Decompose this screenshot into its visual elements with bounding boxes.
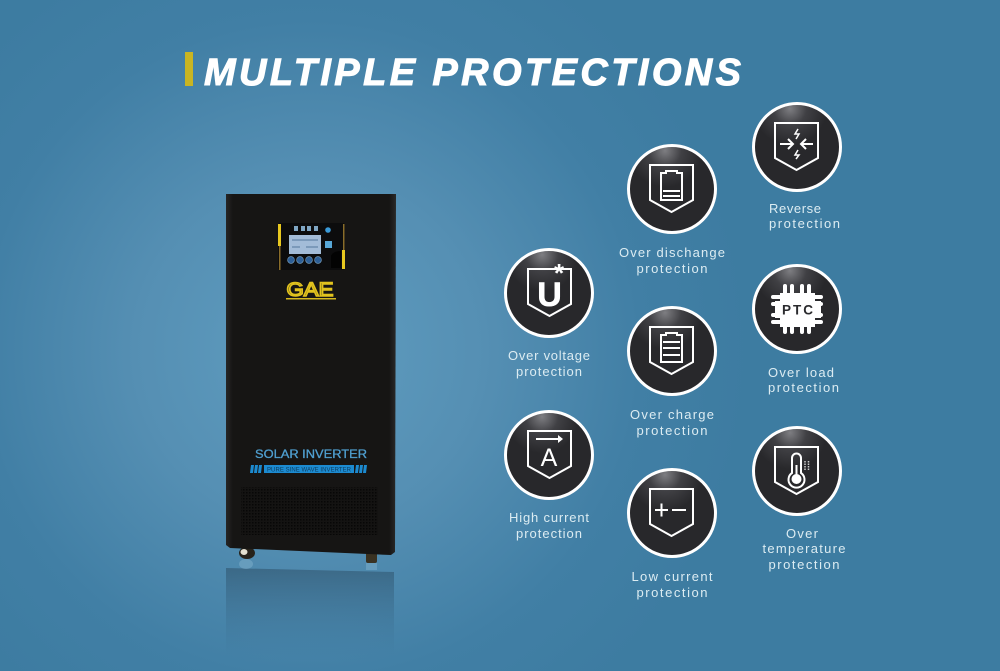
icon: shield with opposing arrows bbox=[754, 104, 840, 190]
item: over charge protection bbox=[628, 308, 716, 438]
icon: shield with A and arrow: A bbox=[541, 444, 558, 472]
product tagline stripe: PURE SINE WAVE INVERTER bbox=[267, 468, 352, 474]
title bbox=[185, 52, 741, 94]
label: Over charge bbox=[630, 407, 714, 422]
item: over temperature protection bbox=[754, 428, 846, 572]
icon: shield with thermometer bbox=[754, 428, 840, 514]
label: Reverse bbox=[769, 201, 821, 216]
label: protection bbox=[516, 364, 582, 379]
brand logo: GAE bbox=[286, 280, 334, 301]
label: protection bbox=[768, 380, 839, 395]
item: reverse protection bbox=[754, 104, 840, 231]
mode switch bbox=[325, 241, 332, 248]
label: protection bbox=[636, 585, 708, 600]
label: protection bbox=[768, 557, 840, 572]
icon: shield with plus and minus bbox=[628, 470, 716, 556]
label: protection bbox=[769, 216, 840, 231]
item: over load protection bbox=[754, 266, 840, 395]
cabinet reflection bbox=[226, 568, 394, 660]
label: Over voltage bbox=[508, 348, 590, 363]
label: protection bbox=[636, 261, 708, 276]
label: protection bbox=[516, 526, 582, 541]
item: low current protection bbox=[628, 470, 716, 600]
LCD screen bbox=[289, 235, 321, 254]
title text: MULTIPLE PROTECTIONS bbox=[204, 52, 741, 94]
cabinet body bbox=[226, 194, 396, 555]
icon: shield with U: U bbox=[537, 276, 562, 314]
caster wheels bbox=[239, 547, 377, 563]
wheel reflections bbox=[239, 559, 377, 570]
item: over voltage protection bbox=[506, 250, 592, 379]
label: protection bbox=[636, 423, 708, 438]
control panel bbox=[278, 223, 345, 270]
icon: shield with U bbox=[506, 250, 592, 336]
icon: PTC chip: PTC bbox=[782, 302, 813, 318]
label: Over bbox=[786, 526, 819, 541]
indicator lights bbox=[294, 226, 318, 231]
icon: shield with U: * bbox=[554, 258, 565, 288]
item: over dischange protection bbox=[619, 146, 725, 276]
item: high current protection bbox=[506, 412, 592, 541]
icon: shield with full battery bbox=[628, 308, 716, 394]
label: temperature bbox=[762, 541, 846, 556]
label: Over load bbox=[768, 365, 834, 380]
label: Over dischange bbox=[619, 245, 725, 260]
icon: shield with low battery bbox=[628, 146, 716, 232]
product tagline stripe bbox=[250, 465, 367, 474]
label: Low current bbox=[632, 569, 713, 584]
panel gold trim bbox=[278, 224, 281, 246]
panel buttons bbox=[288, 257, 321, 263]
product name: SOLAR INVERTER bbox=[255, 449, 367, 461]
power light bbox=[325, 227, 331, 233]
power socket bbox=[331, 251, 341, 268]
label: High current bbox=[509, 510, 589, 525]
product: solar inverter cabinet bbox=[226, 194, 396, 660]
title accent bar bbox=[185, 52, 193, 86]
cabinet vent grid bbox=[241, 487, 378, 535]
